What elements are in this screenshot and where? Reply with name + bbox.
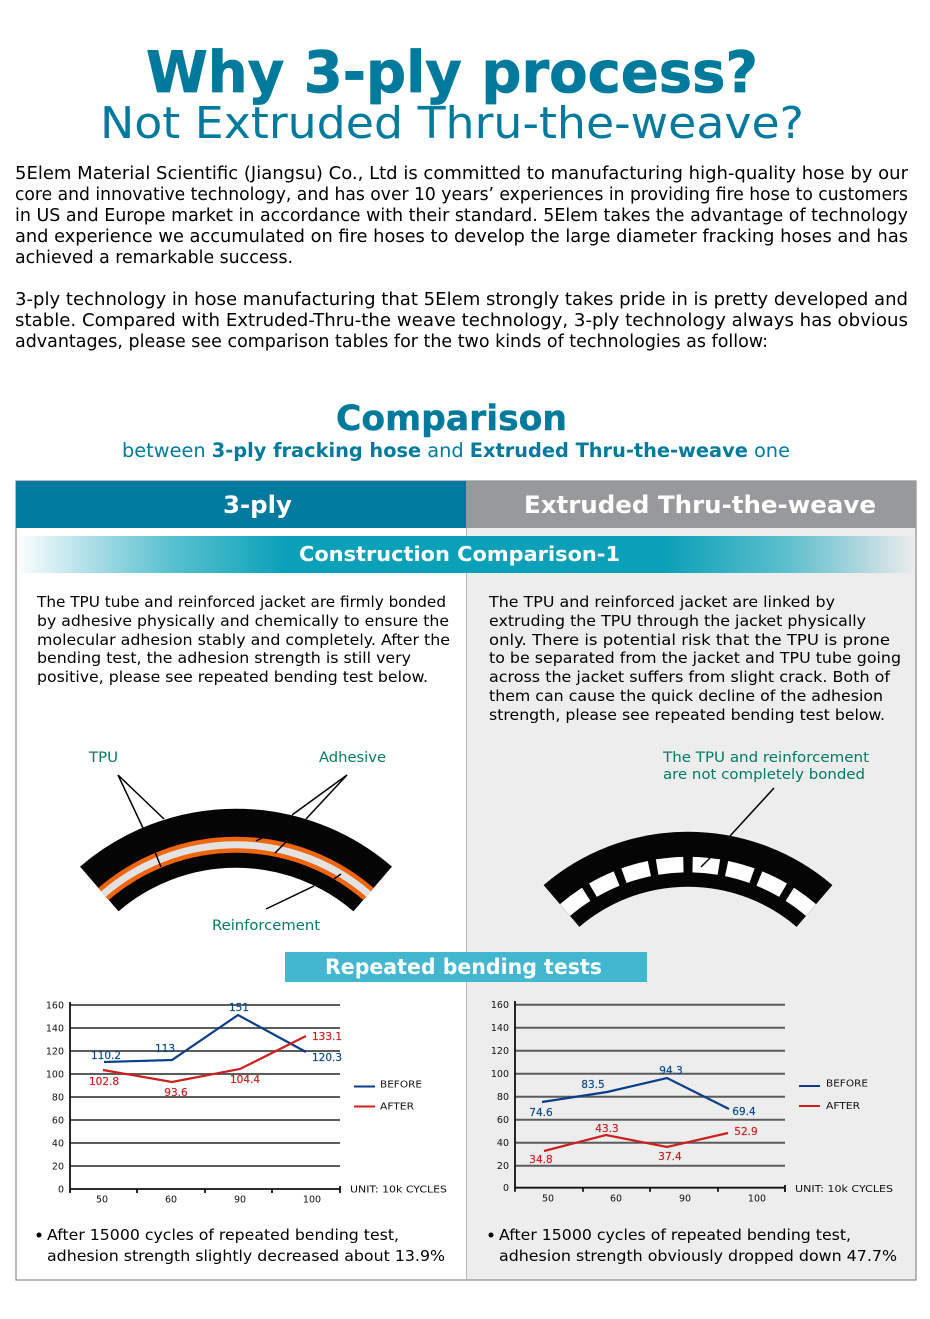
- y axis labels: 0: [58, 1184, 64, 1196]
- label: Adhesive: [256, 750, 386, 853]
- series: after: [89, 1031, 342, 1099]
- intro paragraph 2: 3-ply technology in hose manufacturing that 5Elem strongly takes pride in is pretty developed and: [15, 290, 908, 310]
- legend: [354, 1080, 422, 1112]
- series: before: 120.3: [312, 1052, 342, 1064]
- intro paragraph 2: stable. Compared with Extruded-Thru-the weave technology, 3-ply technology always has obvious: [15, 311, 908, 331]
- text: extruded construction: across the jacket suffers from slight crack. Both of: [489, 668, 891, 686]
- x axis labels: [96, 1194, 321, 1206]
- y axis labels: 120: [491, 1046, 509, 1057]
- intro paragraph 2: advantages, please see comparison tables for the two kinds of technologies as follow:: [15, 332, 768, 352]
- comparison heading: Comparison: [336, 399, 567, 439]
- intro paragraph 1: 5Elem Material Scientific (Jiangsu) Co., Ltd is committed to manufacturing high-quality hose by our: [15, 164, 909, 184]
- text: extruded construction: [488, 593, 901, 724]
- x axis labels: 100: [303, 1194, 321, 1206]
- line chart: 3-ply bending test: [46, 1000, 447, 1206]
- x axis labels: 100: [748, 1194, 766, 1204]
- series: after: 102.8: [89, 1076, 119, 1088]
- series: before: [529, 1065, 756, 1119]
- series: after: [529, 1123, 758, 1166]
- text: extruded construction: to be separated from the jacket and TPU tube going: [489, 649, 901, 667]
- series: after: 133.1: [312, 1031, 342, 1043]
- series: before: 69.4: [732, 1106, 756, 1118]
- intro paragraph 1: achieved a remarkable success.: [15, 248, 293, 268]
- series: before: 83.5: [581, 1079, 605, 1091]
- text: 3-ply construction: by adhesive physically and chemically to ensure the: [37, 612, 449, 630]
- y axis labels: 80: [52, 1092, 64, 1104]
- legend: BEFORE: [826, 1078, 868, 1090]
- y axis labels: 120: [46, 1046, 64, 1058]
- series: after: 52.9: [734, 1126, 758, 1138]
- y axis labels: 100: [491, 1069, 509, 1080]
- y axis labels: 60: [52, 1116, 64, 1126]
- conclusion: extruded: [488, 1226, 897, 1265]
- conclusion: 3-ply: [36, 1226, 445, 1265]
- text: 3-ply construction: positive, please see repeated bending test below.: [37, 668, 428, 686]
- label: Reinforcement: Reinforcement: [212, 918, 320, 934]
- series: before: 74.6: [529, 1107, 553, 1119]
- comparison heading: between 3-ply fracking hose and Extruded Thru-the-weave one: [122, 439, 790, 462]
- x axis labels: 50: [96, 1194, 108, 1206]
- comparison heading: [122, 399, 790, 462]
- legend: AFTER: [380, 1102, 414, 1112]
- title: Not Extruded Thru-the-weave?: [100, 98, 804, 149]
- y axis labels: [46, 1000, 64, 1196]
- y axis labels: 20: [52, 1162, 64, 1172]
- text: 3-ply construction: bending test, the adhesion strength is still very: [37, 649, 411, 667]
- banner: construction comparison: Construction Comparison-1: [299, 542, 620, 566]
- intro paragraph 1: [15, 164, 909, 268]
- title: Why 3-ply process?: [146, 40, 758, 106]
- x axis labels: 90: [679, 1194, 691, 1204]
- diagram: extruded hose cross-section: [562, 750, 869, 910]
- text: 3-ply construction: The TPU tube and reinforced jacket are firmly bonded: [36, 593, 446, 611]
- text: extruded construction: extruding the TPU through the jacket physically: [489, 612, 866, 630]
- banner: repeated bending tests: [285, 952, 647, 982]
- series: after: 93.6: [164, 1087, 188, 1099]
- intro paragraph 1: and experience we accumulated on fire hoses to develop the large diameter fracking hoses and has: [15, 227, 908, 247]
- series: before: 110.2: [91, 1050, 121, 1062]
- text: extruded construction: only. There is potential risk that the TPU is prone: [489, 631, 890, 649]
- label: Adhesive: Adhesive: [319, 750, 386, 766]
- y axis labels: 140: [491, 1023, 509, 1034]
- label: TPU: TPU: [88, 750, 118, 766]
- x axis labels: 60: [165, 1194, 177, 1206]
- y axis labels: 0: [503, 1183, 509, 1194]
- x axis labels: 90: [234, 1194, 246, 1206]
- legend: AFTER: [826, 1101, 860, 1112]
- y axis labels: 80: [497, 1092, 509, 1103]
- y axis labels: 40: [497, 1138, 509, 1149]
- intro paragraph 2: [15, 290, 908, 352]
- y axis labels: 20: [497, 1161, 509, 1172]
- intro paragraph 1: in US and Europe market in accordance with their standard. 5Elem takes the advantage of technology: [15, 206, 908, 226]
- x axis labels: [542, 1194, 766, 1204]
- series: after: 37.4: [658, 1151, 682, 1163]
- panel: comparison table: [16, 481, 916, 1280]
- y axis labels: 160: [491, 1000, 509, 1011]
- conclusion: 3-ply: After 15000 cycles of repeated bending test,: [47, 1226, 399, 1244]
- intro paragraph 1: core and innovative technology, and has over 10 years’ experiences in providing fire hose to customers: [15, 185, 908, 205]
- series: before: [91, 1002, 342, 1064]
- legend: [799, 1078, 868, 1112]
- y axis labels: 100: [46, 1070, 64, 1080]
- series: before: 113: [155, 1043, 175, 1055]
- conclusion: 3-ply: adhesion strength slightly decreased about 13.9%: [47, 1247, 445, 1265]
- series: after: 104.4: [230, 1074, 260, 1086]
- text: extruded construction: The TPU and reinforced jacket are linked by: [488, 593, 835, 611]
- column header: 3-ply: 3-ply: [223, 491, 292, 519]
- column header: Extruded Thru-the-weave: Extruded Thru-the-weave: [524, 491, 876, 519]
- series: after: 43.3: [595, 1123, 619, 1135]
- banner: repeated bending tests: Repeated bending tests: [325, 955, 602, 979]
- label: not completely bonded: [662, 750, 869, 867]
- series: before: 94.3: [659, 1065, 683, 1077]
- panel background: [16, 481, 916, 1280]
- conclusion: extruded: After 15000 cycles of repeated bending test,: [499, 1226, 851, 1244]
- y axis labels: 60: [497, 1115, 509, 1126]
- diagram: 3-ply hose cross-section: [88, 750, 386, 934]
- y axis labels: 140: [46, 1024, 64, 1034]
- text: extruded construction: them can cause the quick decline of the adhesion: [489, 687, 883, 705]
- x axis labels: 50: [542, 1194, 554, 1204]
- banner: construction comparison: [16, 536, 916, 573]
- text: extruded construction: strength, please see repeated bending test below.: [489, 706, 885, 724]
- series: before: 151: [229, 1002, 249, 1014]
- column header: Extruded Thru-the-weave: [466, 481, 916, 528]
- y axis labels: 160: [46, 1000, 64, 1012]
- column header: 3-ply: [16, 481, 466, 528]
- label: Reinforcement: [212, 874, 341, 934]
- y axis labels: [491, 1000, 509, 1194]
- y axis labels: 40: [52, 1138, 64, 1150]
- series: after: 34.8: [529, 1154, 553, 1166]
- x axis labels: 60: [610, 1194, 622, 1204]
- conclusion: extruded: adhesion strength obviously dropped down 47.7%: [499, 1247, 897, 1265]
- text: 3-ply construction: [36, 593, 450, 686]
- unit label: UNIT: 10k CYCLES: [795, 1184, 893, 1195]
- label: TPU: [88, 750, 164, 867]
- title: [100, 40, 804, 149]
- unit label: UNIT: 10k CYCLES: [350, 1184, 447, 1196]
- label: not completely bonded: The TPU and reinforcement: [662, 750, 869, 766]
- text: 3-ply construction: molecular adhesion stably and completely. After the: [37, 631, 450, 649]
- legend: BEFORE: [380, 1080, 422, 1090]
- line chart: extruded bending test: [491, 1000, 893, 1204]
- label: not completely bonded: are not completely bonded: [663, 767, 865, 783]
